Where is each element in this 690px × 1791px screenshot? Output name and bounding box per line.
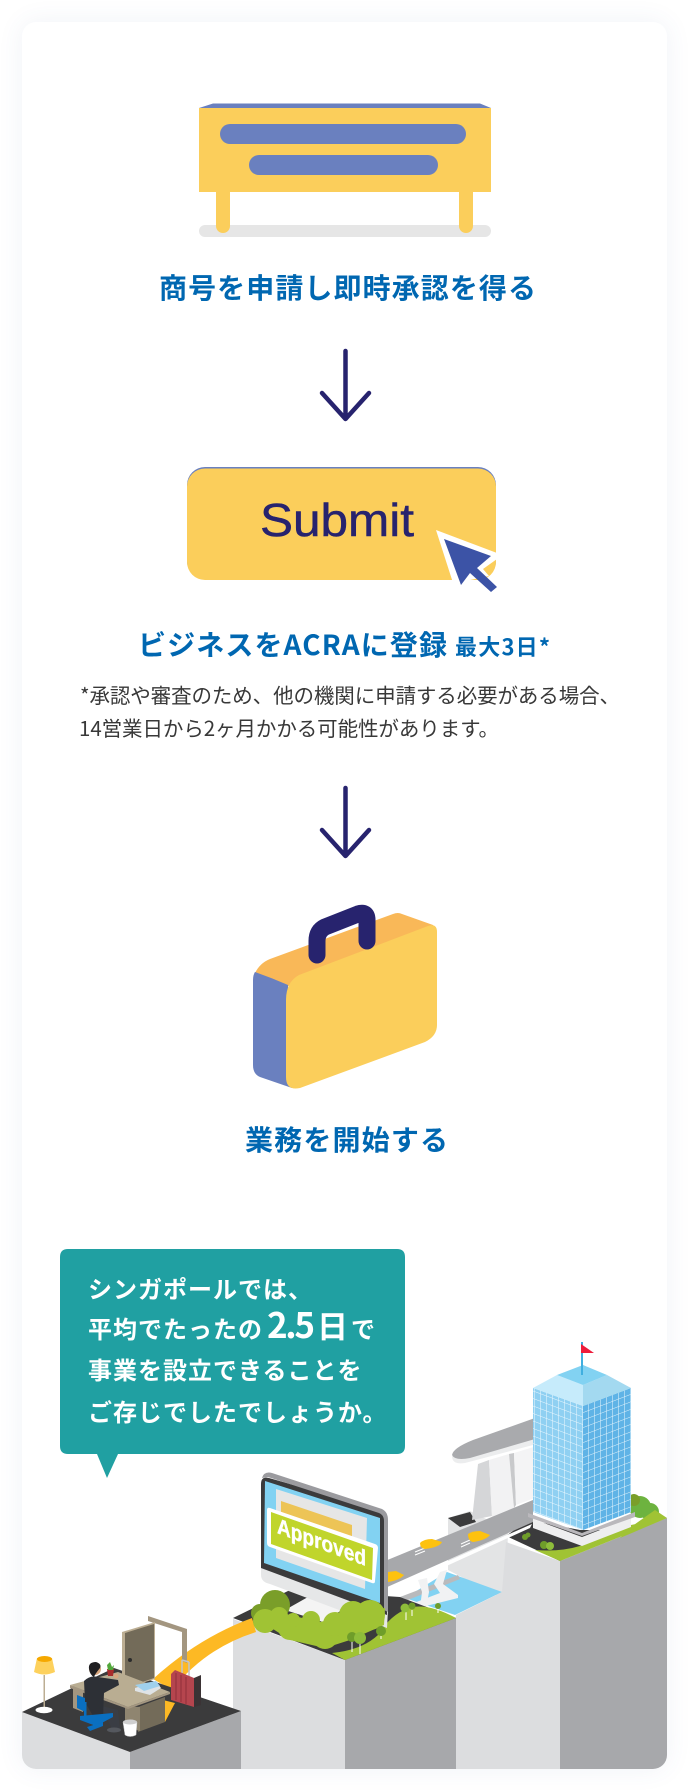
text: footnote: 14営業日から2ヶ月かかる可能性があります。 [79, 712, 499, 742]
arrow: step 2 to step 3 [322, 788, 369, 856]
callout line 2: で [351, 1310, 376, 1345]
arrow: step 1 to step 2 [322, 351, 369, 419]
callout line 2: 平均でたったの [88, 1310, 263, 1345]
button label: Submit [260, 494, 414, 546]
callout line 3: 事業を設立できることを [88, 1351, 363, 1386]
heading: step 1: 商号を申請し即時承認を得る [159, 267, 536, 307]
trash can [123, 1720, 137, 1736]
desk [70, 1672, 170, 1732]
text: footnote [79, 679, 620, 742]
car [468, 1531, 490, 1542]
callout line 4: ご存じでしたでしょうか。 [88, 1393, 388, 1428]
icon: signboard [199, 104, 491, 237]
binders [135, 1681, 161, 1695]
car [420, 1539, 442, 1549]
heading: step 2: ビジネスをACRAに登録 [138, 624, 447, 664]
suitcase [171, 1660, 201, 1707]
duration note: 最大3日* [455, 630, 550, 662]
bushes [251, 1590, 385, 1649]
monitor stand [288, 1598, 340, 1622]
approved badge: Approved [277, 1513, 366, 1571]
block 2 [233, 1590, 456, 1769]
monitor [261, 1473, 388, 1628]
road with cars [385, 1500, 533, 1612]
briefcase handle [317, 913, 367, 955]
trees at tower [522, 1532, 554, 1550]
icon: mouse cursor [436, 530, 497, 592]
block 3 [456, 1518, 667, 1769]
flag [581, 1342, 594, 1375]
block 1 [22, 1668, 241, 1769]
car [388, 1571, 404, 1582]
bushes behind tower [630, 1494, 659, 1518]
callout line 2: 日 [317, 1302, 348, 1347]
door [122, 1616, 187, 1689]
tower base [528, 1512, 635, 1546]
person [84, 1662, 121, 1732]
illustration: isometric journey [22, 1342, 667, 1769]
text: footnote: *承認や審査のため、他の機関に申請する必要がある場合、 [80, 679, 620, 709]
icon: briefcase [253, 913, 437, 1089]
arc: growth path [153, 1618, 256, 1690]
icon: submit button [187, 467, 497, 592]
water [405, 1572, 502, 1615]
callout: 2.5 days [60, 1249, 405, 1478]
arc lower part [165, 1700, 175, 1722]
callout line 2 [88, 1298, 376, 1349]
callout line 2: 2.5 [267, 1298, 315, 1349]
callout line 1: シンガポールでは、 [88, 1270, 313, 1305]
lamp [34, 1656, 55, 1713]
trees at monitor [347, 1602, 441, 1654]
chair [77, 1695, 113, 1731]
heading: step 3: 業務を開始する [245, 1119, 448, 1159]
landmark: marina bay sands [452, 1418, 540, 1520]
plant [107, 1662, 114, 1676]
bridge supports [400, 1570, 460, 1606]
far wall behind bridge [448, 1511, 508, 1600]
tower [528, 1342, 635, 1546]
